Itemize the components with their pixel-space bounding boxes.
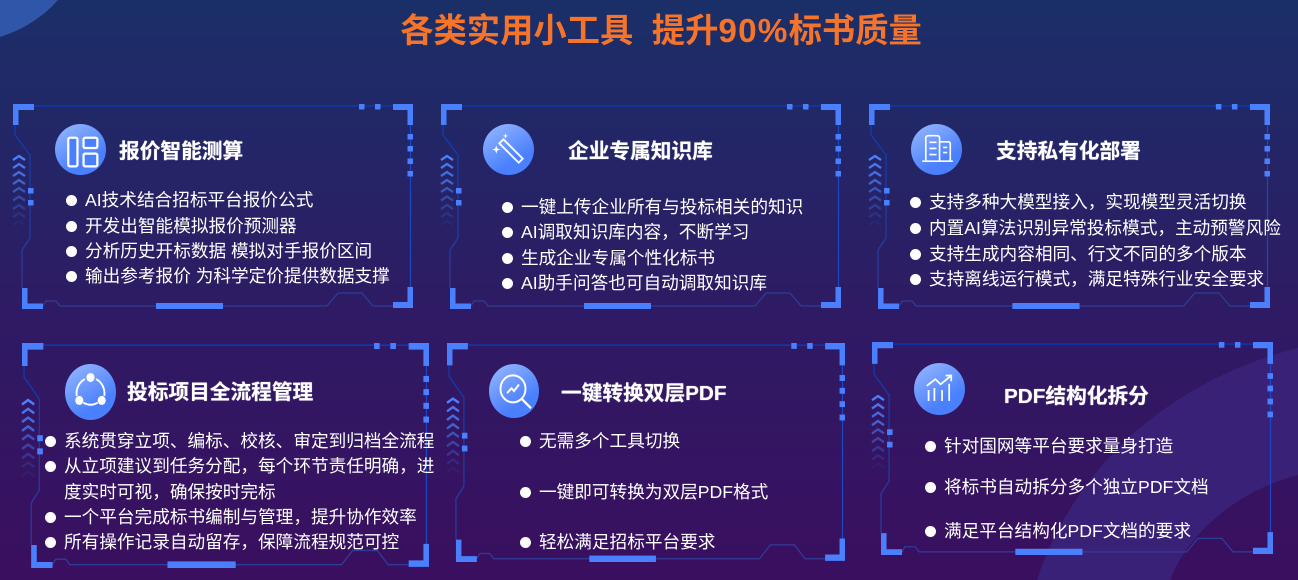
heading: 报价智能测算 [119,140,243,163]
bullet list: 生成企业专属个性化标书 [521,248,715,268]
bullet list [910,192,1281,289]
bullet list: AI技术结合招标平台报价公式 [85,190,313,210]
bullet list: 支持离线运行模式，满足特殊行业安全要求 [929,269,1264,289]
bullet list: 无需多个工具切换 [539,431,680,451]
bullet list: 一个平台完成标书编制与管理，提升协作效率 [64,507,417,527]
bullet list: 针对国网等平台要求量身打造 [944,436,1173,456]
panel frame [440,104,841,309]
panel frame [21,343,429,568]
heading: 一键转换双层PDF [561,382,727,405]
bullet list: 输出参考报价 为科学定价提供数据支撑 [85,266,390,286]
bullet list: 从立项建议到任务分配，每个环节责任明确，进 [64,456,434,476]
bullet list: 满足平台结构化PDF文档的要求 [944,521,1191,541]
bullet list: 开发出智能模拟报价预测器 [85,216,297,236]
bullet list: 度实时可视，确保按时完标 [64,482,276,502]
panel frame [868,104,1270,309]
icon: bar trend chart [914,363,965,415]
bullet list: 所有操作记录自动留存，保障流程规范可控 [64,532,399,552]
bullet list: 系统贯穿立项、编标、校核、审定到归档全流程 [64,431,434,451]
panel: 支持私有化部署 [868,104,1281,309]
heading: PDF结构化拆分 [1004,385,1149,408]
icon: building [911,124,962,175]
panel frame [871,342,1273,555]
bullet list [520,431,768,552]
bullet list: 分析历史开标数据 模拟对手报价区间 [85,241,372,261]
heading: 支持私有化部署 [996,140,1141,163]
bullet list: AI调取知识库内容，不断学习 [521,222,749,242]
heading: 企业专属知识库 [568,140,713,163]
bullet list [45,431,434,552]
panel: PDF结构化拆分 [871,342,1273,555]
bullet list: 一键上传企业所有与投标相关的知识 [521,197,803,217]
bullet list: 将标书自动拆分多个独立PDF文档 [944,477,1209,497]
panel: 一键转换双层PDF [446,343,845,562]
title: 各类实用小工具 提升90%标书质量 [400,13,922,50]
bullet list [66,190,390,286]
bullet list [925,436,1209,541]
icon: magic wand [483,124,534,175]
bullet list: 支持多种大模型接入，实现模型灵活切换 [929,192,1247,212]
bullet list: 一键即可转换为双层PDF格式 [539,482,768,502]
heading: 投标项目全流程管理 [127,381,313,404]
bullet list: 内置AI算法识别异常投标模式，主动预警风险 [929,218,1281,238]
panel frame [12,104,413,309]
bullet list: 轻松满足招标平台要求 [539,532,715,552]
panel: 报价智能测算 [12,104,413,309]
bullet list: 支持生成内容相同、行文不同的多个版本 [929,244,1247,264]
bullet list [502,197,803,293]
panel frame [446,343,845,562]
panel: 投标项目全流程管理 [21,343,434,568]
bullet list: AI助手问答也可自动调取知识库 [521,273,767,293]
panel: 企业专属知识库 [440,104,841,309]
icon: process cycle [65,364,116,420]
icon: layout grid [55,124,106,175]
icon: magnifier [489,364,539,418]
